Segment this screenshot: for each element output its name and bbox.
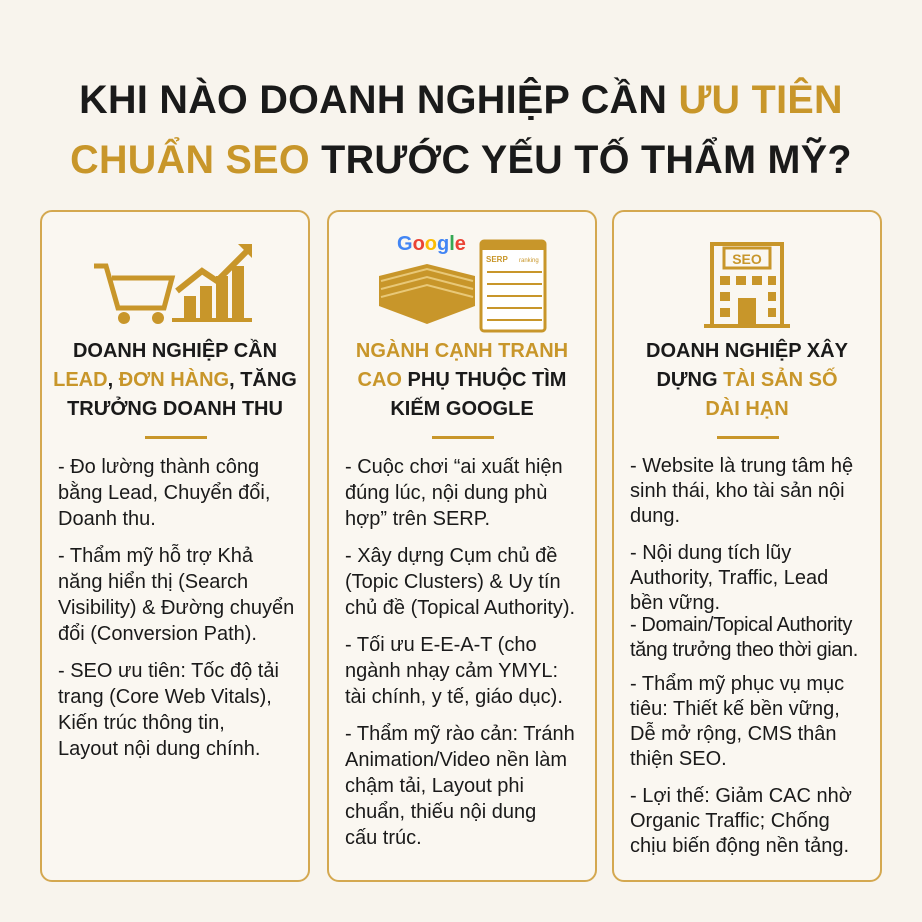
body text: hợp” trên SERP. — [345, 508, 490, 530]
body text: (Topic Clusters) & Uy tín — [345, 571, 561, 593]
body text: tăng trưởng theo thời gian. — [630, 639, 858, 661]
body text: trang (Core Web Vitals), — [58, 686, 272, 708]
heading: DOANH NGHIỆP CẦN — [73, 340, 277, 362]
icon: SEO building: SEO — [732, 251, 762, 267]
panel: assets — [612, 210, 882, 882]
body text — [345, 456, 575, 849]
title: CHUẨN SEO TRƯỚC YẾU TỐ THẨM MỸ? — [70, 138, 852, 182]
body text: - Cuộc chơi “ai xuất hiện — [345, 456, 563, 478]
title: KHI NÀO DOANH NGHIỆP CẦN ƯU TIÊN — [79, 78, 843, 122]
panel: competition — [327, 210, 597, 882]
body text: - Lợi thế: Giảm CAC nhờ — [630, 785, 852, 807]
body text: dung. — [630, 505, 680, 527]
heading — [53, 338, 297, 420]
body text: Layout nội dung chính. — [58, 738, 260, 760]
heading: KIẾM GOOGLE — [390, 398, 534, 420]
body text: chủ đề (Topical Authority). — [345, 597, 575, 619]
body text — [630, 455, 858, 857]
body text — [58, 456, 294, 760]
heading — [646, 338, 848, 420]
body text: chuẩn, thiếu nội dung — [345, 801, 536, 823]
heading: NGÀNH CẠNH TRANH — [356, 340, 568, 362]
body text: - Thẩm mỹ phục vụ mục — [630, 673, 844, 695]
body text: - Thẩm mỹ rào cản: Tránh — [345, 723, 575, 745]
body text: tiêu: Thiết kế bền vững, — [630, 698, 840, 720]
panel: lead — [40, 210, 310, 882]
heading: DÀI HẠN — [705, 398, 789, 420]
body text: đúng lúc, nội dung phù — [345, 482, 547, 504]
body text: - Xây dựng Cụm chủ đề — [345, 545, 557, 567]
body text: cấu trúc. — [345, 827, 422, 849]
body text: - Đo lường thành công — [58, 456, 259, 478]
body text: đổi (Conversion Path). — [58, 623, 257, 645]
body text: Visibility) & Đường chuyển — [58, 597, 294, 619]
icon: google ring serp: Google — [397, 233, 466, 255]
heading: DỰNG TÀI SẢN SỐ — [656, 369, 838, 391]
body text: ngành nhạy cảm YMYL: — [345, 660, 558, 682]
title — [70, 77, 852, 182]
body text: bền vững. — [630, 592, 720, 614]
heading: DOANH NGHIỆP XÂY — [646, 340, 848, 362]
body text: bằng Lead, Chuyển đổi, — [58, 482, 270, 504]
heading: CAO PHỤ THUỘC TÌM — [358, 369, 566, 391]
heading: TRƯỞNG DOANH THU — [67, 398, 283, 420]
body text: - Nội dung tích lũy — [630, 542, 791, 564]
body text: thiện SEO. — [630, 748, 727, 770]
body text: chậm tải, Layout phi — [345, 775, 524, 797]
icon: google ring serp: ranking — [519, 258, 539, 264]
body text: - SEO ưu tiên: Tốc độ tải — [58, 660, 279, 682]
body text: - Thẩm mỹ hỗ trợ Khả — [58, 545, 253, 567]
body text: Organic Traffic; Chống — [630, 810, 830, 832]
body text: tài chính, y tế, giáo dục). — [345, 686, 563, 708]
body text: Animation/Video nền làm — [345, 749, 567, 771]
heading: LEAD, ĐƠN HÀNG, TĂNG — [53, 369, 297, 391]
icon: google ring serp: SERP — [486, 255, 508, 264]
heading — [356, 339, 568, 420]
body text: chịu biến động nền tảng. — [630, 835, 849, 857]
body text: - Website là trung tâm hệ — [630, 455, 853, 477]
icon: SEO building — [704, 242, 790, 328]
body text: năng hiển thị (Search — [58, 571, 248, 593]
body text: - Tối ưu E-E-A-T (cho — [345, 634, 537, 656]
body text: sinh thái, kho tài sản nội — [630, 480, 845, 502]
body text: Authority, Traffic, Lead — [630, 567, 828, 589]
body text: Doanh thu. — [58, 508, 156, 530]
icon: cart and chart — [94, 244, 252, 324]
body text: Kiến trúc thông tin, — [58, 712, 225, 734]
body text: - Domain/Topical Authority — [630, 614, 852, 636]
body text: Dễ mở rộng, CMS thân — [630, 723, 837, 745]
icon: google ring serp — [379, 233, 546, 332]
